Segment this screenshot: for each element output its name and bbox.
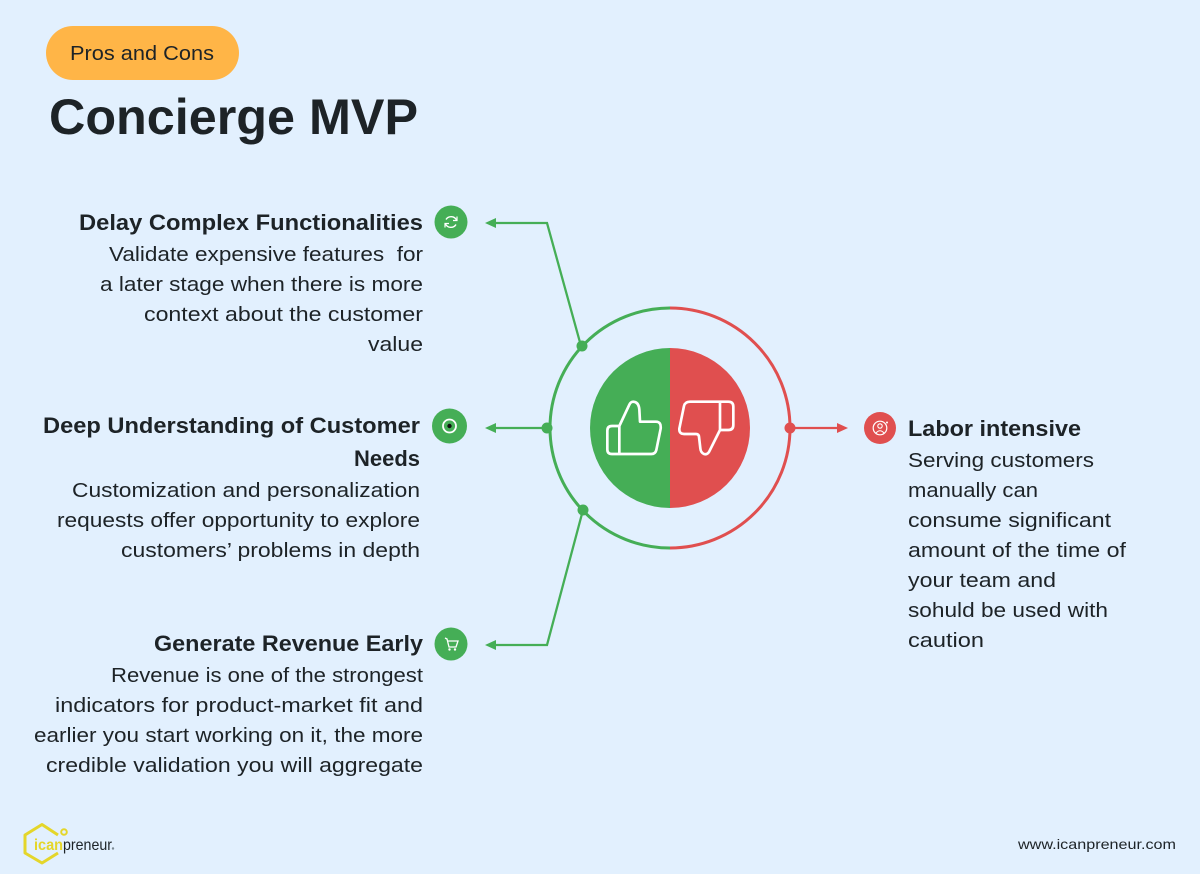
text block: Delay Complex Functionalities: context about the customer	[144, 304, 423, 326]
text block: Deep Understanding of Customer Needs: customers’ problems in depth	[121, 540, 420, 562]
text block: Deep Understanding of Customer Needs: Deep Understanding of Customer	[43, 413, 420, 438]
text block: Generate Revenue Early: Generate Revenue Early	[154, 631, 423, 656]
connector: red arrow	[790, 423, 848, 433]
text block: Labor intensive: Serving customers	[908, 450, 1094, 472]
text block: Labor intensive: manually can	[908, 480, 1038, 502]
text block: Labor intensive: caution	[908, 630, 984, 652]
badge: Pros and Cons	[46, 26, 239, 80]
text block: Deep Understanding of Customer Needs: Needs	[354, 446, 420, 471]
icon: thumbs up	[607, 402, 661, 454]
inner disc: red half	[670, 348, 750, 508]
text block: Deep Understanding of Customer Needs	[43, 413, 420, 562]
connector: bottom green arrow	[485, 510, 583, 650]
logo: icanpreneur: ican	[34, 837, 63, 854]
icon: refresh	[434, 206, 468, 238]
text block: Deep Understanding of Customer Needs: Customization and personalization	[72, 480, 420, 502]
text block: Delay Complex Functionalities: Delay Complex Functionalities	[79, 210, 423, 235]
text block: Labor intensive: amount of the time of	[908, 540, 1127, 562]
text block: Deep Understanding of Customer Needs: requests offer opportunity to explore	[57, 510, 420, 532]
text block: Labor intensive: consume significant	[908, 510, 1111, 532]
title: Concierge MVP	[49, 89, 418, 145]
text block: Generate Revenue Early: indicators for product-market fit and	[55, 695, 423, 717]
icon: cart	[434, 628, 468, 660]
text block: Delay Complex Functionalities	[79, 210, 423, 356]
text block: Generate Revenue Early: Revenue is one of the strongest	[111, 665, 423, 687]
text block: Labor intensive: Labor intensive	[908, 416, 1081, 441]
icon: person	[864, 412, 896, 444]
logo: icanpreneur	[25, 824, 114, 863]
logo: icanpreneur: preneur	[63, 837, 113, 854]
connector: top green arrow	[485, 218, 581, 346]
text block: Generate Revenue Early: credible validation you will aggregate	[46, 755, 423, 777]
text block: Labor intensive: your team and	[908, 570, 1056, 592]
text block: Labor intensive	[908, 416, 1127, 652]
connector: middle green arrow	[485, 423, 547, 433]
dots on ring	[542, 340, 796, 516]
text block: Delay Complex Functionalities: value	[368, 334, 423, 356]
badge: Pros and Cons: Pros and Cons	[70, 42, 214, 65]
website url: www.icanpreneur.com	[1017, 836, 1176, 852]
icon: target	[432, 408, 467, 444]
text block: Labor intensive: sohuld be used with	[908, 600, 1108, 622]
central diagram	[542, 308, 796, 548]
ring: red half	[670, 308, 790, 548]
text block: Generate Revenue Early: earlier you start working on it, the more	[34, 725, 423, 747]
text block: Delay Complex Functionalities: Validate expensive features for	[109, 244, 423, 266]
inner disc: green half	[590, 348, 670, 508]
icon: thumbs down	[679, 402, 733, 454]
text block: Delay Complex Functionalities: a later stage when there is more	[100, 274, 423, 296]
ring: green half	[550, 308, 670, 548]
text block: Generate Revenue Early	[34, 631, 423, 777]
